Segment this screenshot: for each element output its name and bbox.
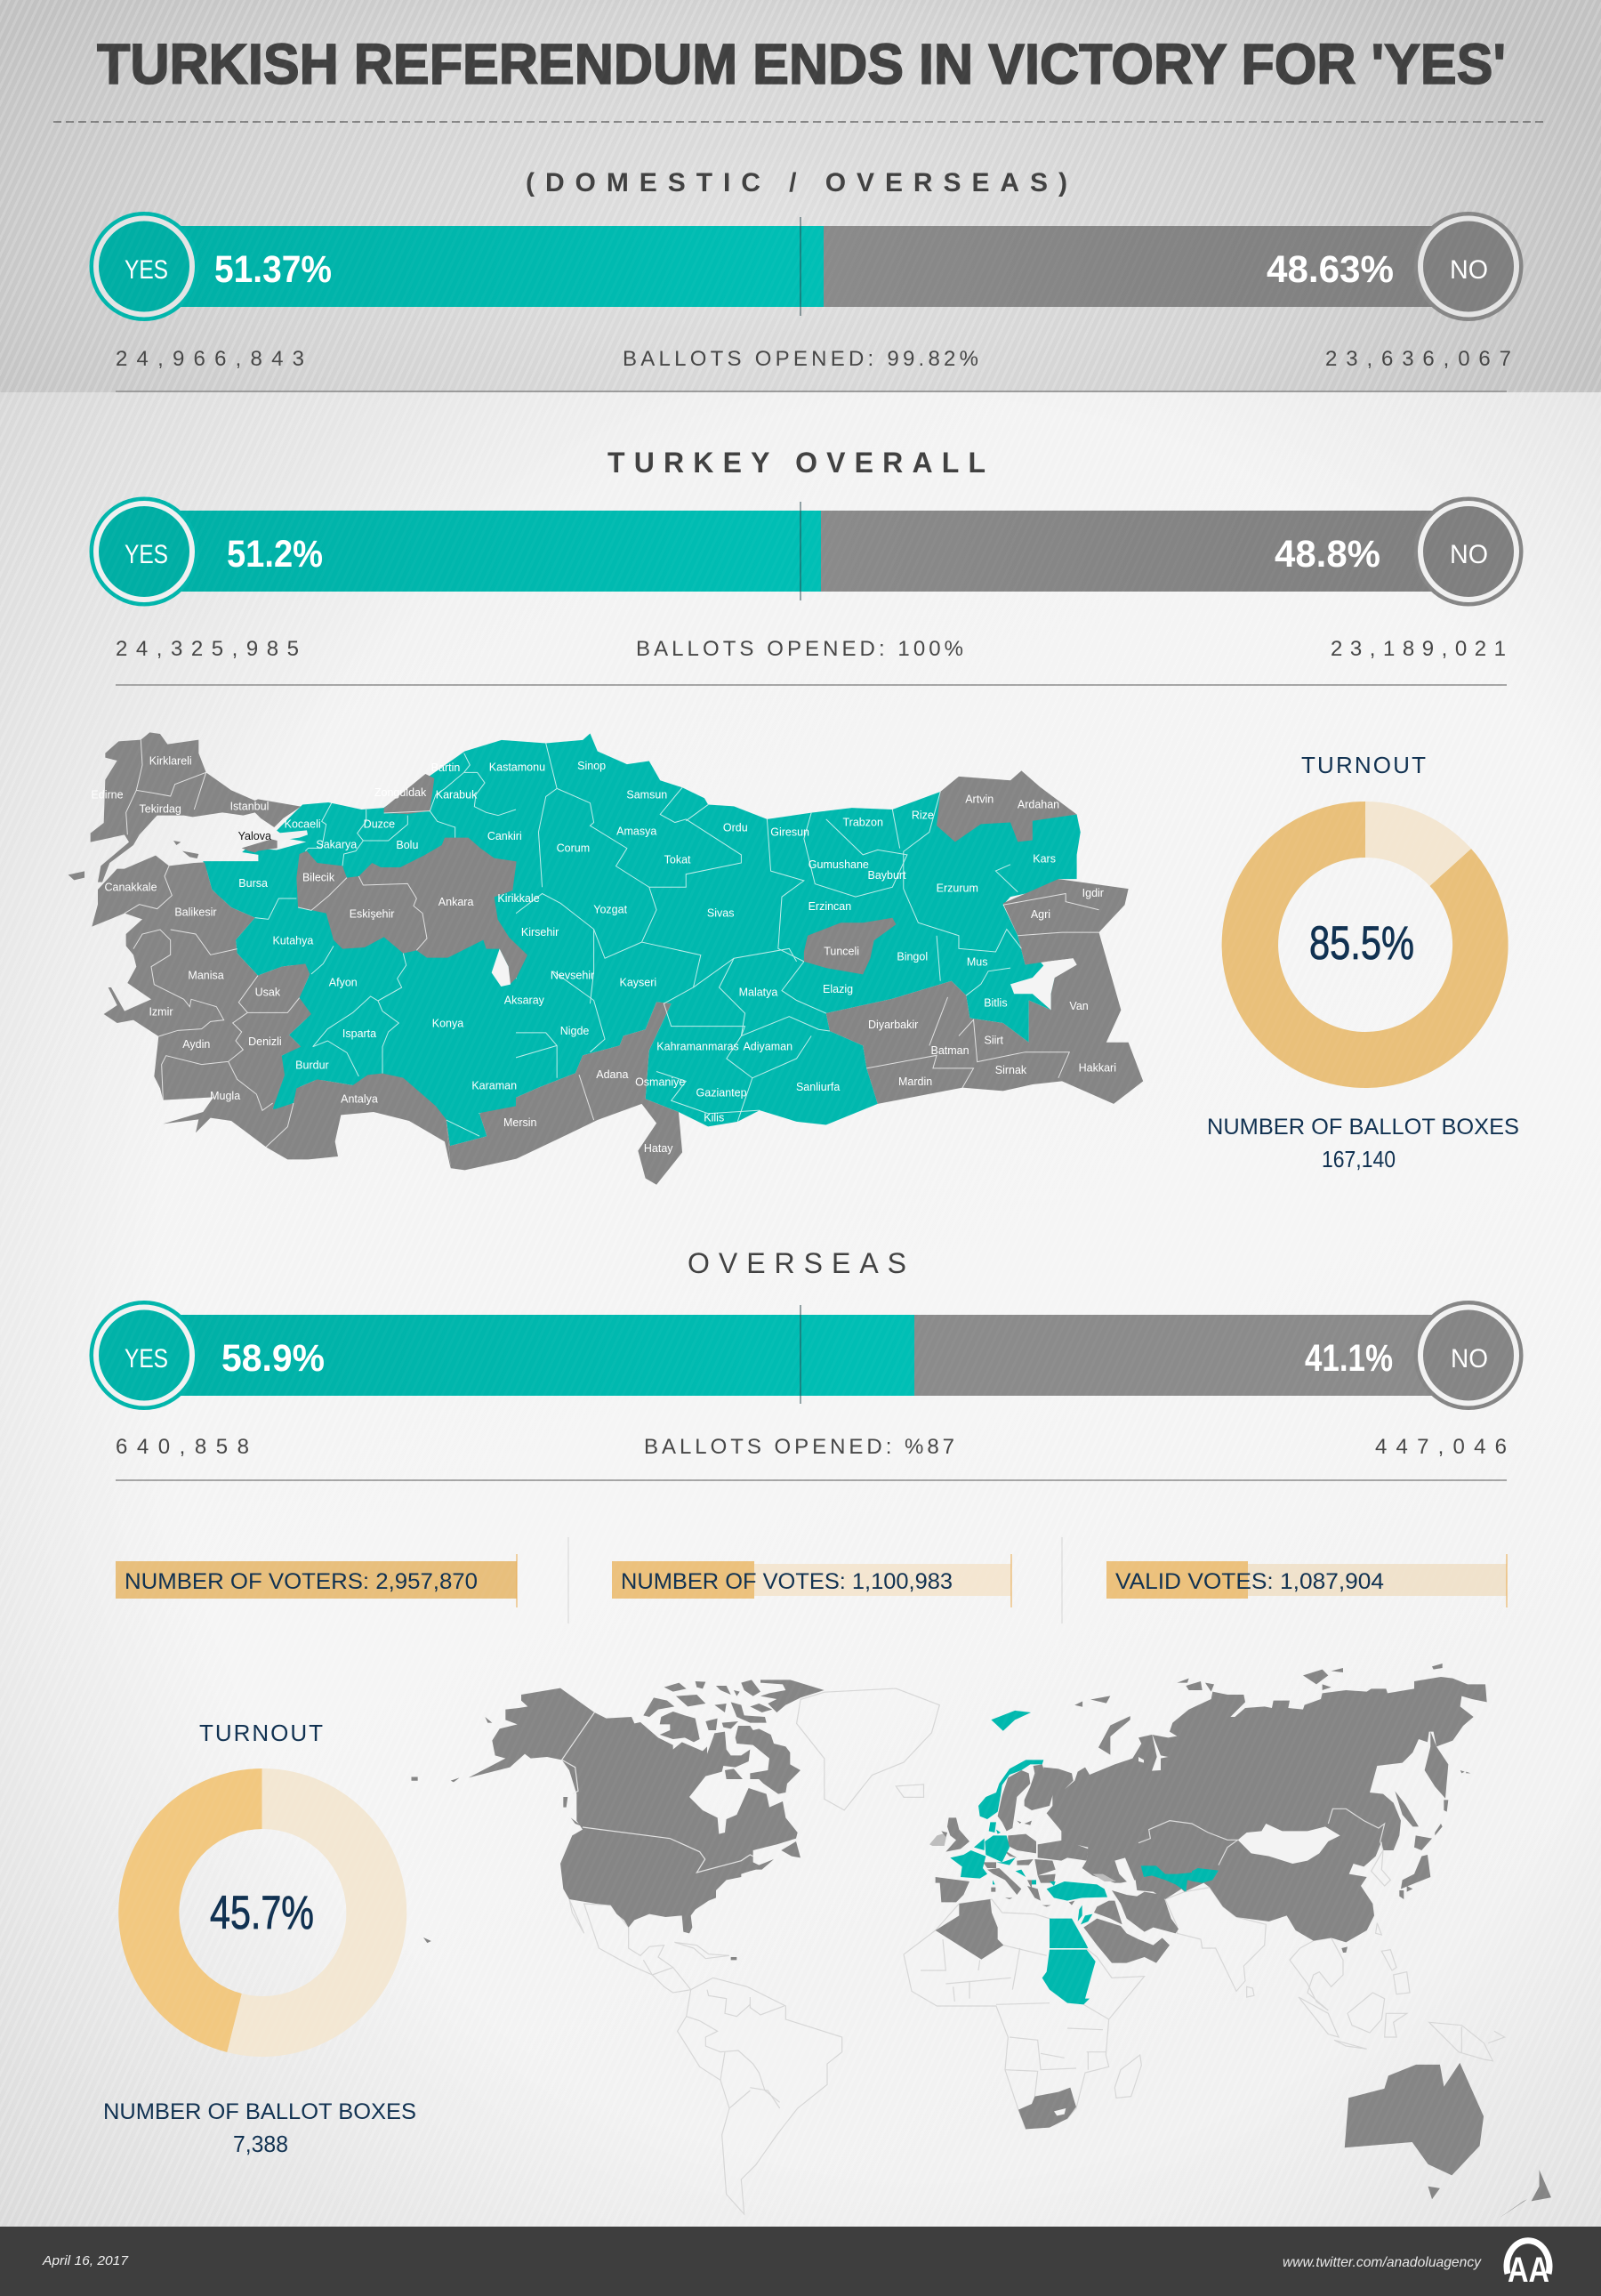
ballots opened: BALLOTS OPENED: 100%: [636, 637, 963, 661]
greenland, islands and oceania: [412, 1688, 1551, 2218]
province labels: Bilecik: [302, 872, 335, 884]
province labels: Ardahan: [1018, 799, 1059, 811]
province labels: Rize: [912, 810, 934, 822]
yes count: 24,325,985: [116, 637, 299, 661]
badge: no: NO: [1450, 540, 1488, 569]
province labels: Duzce: [364, 818, 395, 831]
province labels: Erzurum: [937, 882, 978, 894]
province labels: Karaman: [471, 1080, 517, 1092]
province labels: Izmir: [149, 1006, 173, 1019]
no percent: 41.1%: [1305, 1337, 1393, 1380]
province labels: Tekirdag: [140, 802, 181, 815]
province labels: Balikesir: [174, 906, 217, 918]
stat: number of voters: [116, 1554, 517, 1607]
province labels: Sakarya: [316, 839, 357, 851]
donut chart 45.7%: [118, 1768, 406, 2057]
province labels: Sanliurfa: [796, 1081, 840, 1093]
panel: turkey turnout: [1207, 752, 1519, 1172]
panel: turkey overall result: [89, 447, 1523, 685]
province labels: Manisa: [188, 970, 224, 982]
yes percent: 51.37%: [214, 248, 332, 291]
province labels: Hakkari: [1079, 1062, 1116, 1075]
asia: [1043, 1664, 1505, 2061]
province labels: Afyon: [329, 977, 358, 989]
province labels: Samsun: [626, 789, 667, 802]
panel: overseas result: [89, 1247, 1523, 1480]
map: turkey provinces: [68, 732, 1143, 1185]
province labels: Bursa: [238, 877, 268, 890]
province labels: Karabuk: [436, 789, 478, 802]
province labels: Nevsehir: [551, 970, 594, 982]
province labels: Yozgat: [593, 904, 628, 916]
ballot boxes label: NUMBER OF BALLOT BOXES: [103, 2099, 416, 2124]
americas: [451, 1680, 842, 2214]
badge: no: NO: [1451, 1344, 1488, 1374]
province labels: Canakkale: [104, 881, 157, 893]
province labels: Tunceli: [824, 945, 859, 957]
province labels: Gumushane: [809, 858, 869, 871]
provinces east shapes: [203, 734, 1143, 1185]
province labels: Amasya: [616, 826, 656, 838]
province labels: Malatya: [739, 986, 777, 998]
bar: yes share: [178, 511, 821, 592]
province labels: Sirnak: [995, 1064, 1027, 1076]
province labels: Agri: [1031, 908, 1050, 921]
province labels: Siirt: [984, 1034, 1004, 1046]
province labels: Gaziantep: [696, 1087, 747, 1100]
donut chart 85.5%: [1222, 802, 1508, 1088]
province labels: Adana: [596, 1068, 628, 1081]
province labels: Sinop: [577, 760, 606, 772]
badge: no: NO: [1450, 255, 1488, 285]
heading: turkey overall: TURKEY OVERALL: [607, 447, 986, 479]
no count: 23,189,021: [1331, 637, 1506, 661]
province labels: Kocaeli: [285, 818, 321, 831]
badge: yes: [89, 212, 199, 321]
province labels: Artvin: [965, 793, 994, 805]
province labels: Erzincan: [809, 900, 851, 913]
yes percent: 51.2%: [227, 533, 323, 576]
province labels: Istanbul: [230, 800, 269, 812]
badge: no: [1414, 496, 1523, 607]
province labels: Konya: [432, 1018, 463, 1030]
province labels: Aydin: [182, 1038, 210, 1051]
badge: yes: [89, 1301, 199, 1410]
province labels: Kutahya: [272, 935, 313, 947]
turnout value: 85.5%: [1309, 917, 1414, 970]
no count: 447,046: [1375, 1435, 1507, 1459]
province labels: Trabzon: [843, 817, 883, 829]
badge: no: [1414, 212, 1523, 321]
province labels: Giresun: [770, 826, 809, 838]
logo: AA: AA: [1508, 2251, 1549, 2290]
no count: 23,636,067: [1325, 347, 1511, 371]
heading: domestic overseas: (DOMESTIC / OVERSEAS): [526, 168, 1067, 197]
province labels: Corum: [557, 842, 590, 855]
yes percent: 58.9%: [221, 1337, 325, 1380]
province labels: Sivas: [707, 906, 734, 919]
province labels: Diyarbakir: [868, 1019, 918, 1031]
turnout heading: TURNOUT: [1301, 752, 1426, 778]
province labels: Hatay: [644, 1142, 673, 1155]
stat: valid votes: VALID VOTES: 1,087,904: [1115, 1569, 1384, 1594]
bar: no share: [914, 1315, 1437, 1396]
no percent: 48.63%: [1267, 248, 1394, 291]
province labels: Mugla: [210, 1090, 240, 1102]
province labels: Mersin: [503, 1116, 537, 1129]
province labels: Cankiri: [487, 830, 522, 842]
logo: AA: [1507, 2241, 1549, 2290]
badge: yes: YES: [125, 1344, 168, 1374]
bar: no share: [824, 226, 1437, 307]
ballots opened: BALLOTS OPENED: 99.82%: [623, 347, 978, 371]
stat: number of voters: NUMBER OF VOTERS: 2,957,870: [125, 1569, 478, 1594]
province labels: Elazig: [823, 983, 853, 995]
title: TURKISH REFERENDUM ENDS IN VICTORY FOR 'YES': [97, 32, 1506, 96]
province labels: Kars: [1033, 853, 1056, 866]
province labels: Igdir: [1082, 887, 1104, 899]
province labels: Adiyaman: [743, 1041, 792, 1053]
province labels: Kirsehir: [521, 926, 559, 939]
province labels: Aksaray: [504, 995, 545, 1007]
ballot boxes value: 167,140: [1322, 1146, 1396, 1172]
stat: number of votes: NUMBER OF VOTES: 1,100,983: [621, 1569, 953, 1594]
panel: overseas turnout: [103, 1720, 416, 2157]
stat: number of votes: [612, 1554, 1011, 1607]
province labels: Kastamonu: [489, 761, 545, 774]
province labels: Mardin: [898, 1075, 932, 1088]
ballot boxes value: 7,388: [233, 2131, 288, 2157]
yes count: 24,966,843: [116, 347, 304, 371]
province labels: Mus: [967, 955, 987, 968]
date: April 16, 2017: [42, 2253, 129, 2268]
province labels: Usak: [255, 986, 281, 998]
province labels: [91, 754, 1116, 1155]
yes count: 640,858: [116, 1435, 249, 1459]
ballot boxes label: NUMBER OF BALLOT BOXES: [1207, 1115, 1519, 1140]
map: world: [412, 1664, 1551, 2218]
ballots opened: BALLOTS OPENED: %87: [644, 1435, 954, 1459]
province labels: Kahramanmaras: [656, 1041, 739, 1053]
province labels: Kayseri: [620, 977, 656, 989]
province labels: Osmaniye: [635, 1076, 685, 1089]
province labels: Zonguldak: [374, 786, 427, 799]
province labels: Bitlis: [984, 996, 1008, 1009]
province labels: Ankara: [438, 896, 473, 908]
europe, africa, middle east: [904, 1760, 1179, 2129]
province labels: Van: [1069, 1000, 1089, 1012]
bar: yes share: [178, 1315, 914, 1396]
province labels: Kirklareli: [149, 754, 192, 767]
province labels: Kirikkale: [497, 892, 540, 905]
province labels: Kilis: [704, 1112, 724, 1124]
province labels: Isparta: [342, 1027, 376, 1040]
no percent: 48.8%: [1275, 533, 1380, 576]
bar: yes share: [178, 226, 824, 307]
footer: [0, 2227, 1601, 2296]
province labels: Eskişehir: [350, 907, 394, 920]
badge: no: [1414, 1301, 1523, 1410]
badge: yes: [89, 496, 199, 607]
province labels: Bolu: [396, 839, 418, 851]
bar: no share: [821, 511, 1437, 592]
province labels: Ordu: [723, 822, 748, 834]
province labels: Antalya: [341, 1092, 378, 1105]
province labels: Tokat: [664, 853, 691, 866]
province labels: Nigde: [560, 1025, 589, 1037]
heading: overseas: OVERSEAS: [688, 1247, 906, 1279]
badge: yes: YES: [125, 540, 168, 569]
provinces west shapes: [68, 732, 527, 1168]
province labels: Batman: [930, 1044, 969, 1057]
stat: valid votes: [1106, 1554, 1507, 1607]
province labels: Yalova: [238, 830, 271, 842]
province labels: Bartin: [431, 761, 460, 774]
province labels: Bayburt: [867, 869, 906, 882]
badge: yes: YES: [125, 255, 168, 285]
turnout heading: TURNOUT: [199, 1720, 323, 1746]
province labels: Denizli: [248, 1035, 282, 1048]
turnout value: 45.7%: [210, 1887, 314, 1939]
province labels: Burdur: [295, 1059, 329, 1072]
panel: domestic / overseas result: [89, 168, 1523, 391]
province labels: Edirne: [91, 789, 124, 802]
twitter url: www.twitter.com/anadoluagency: [1283, 2255, 1482, 2270]
province labels: Bingol: [897, 950, 928, 963]
